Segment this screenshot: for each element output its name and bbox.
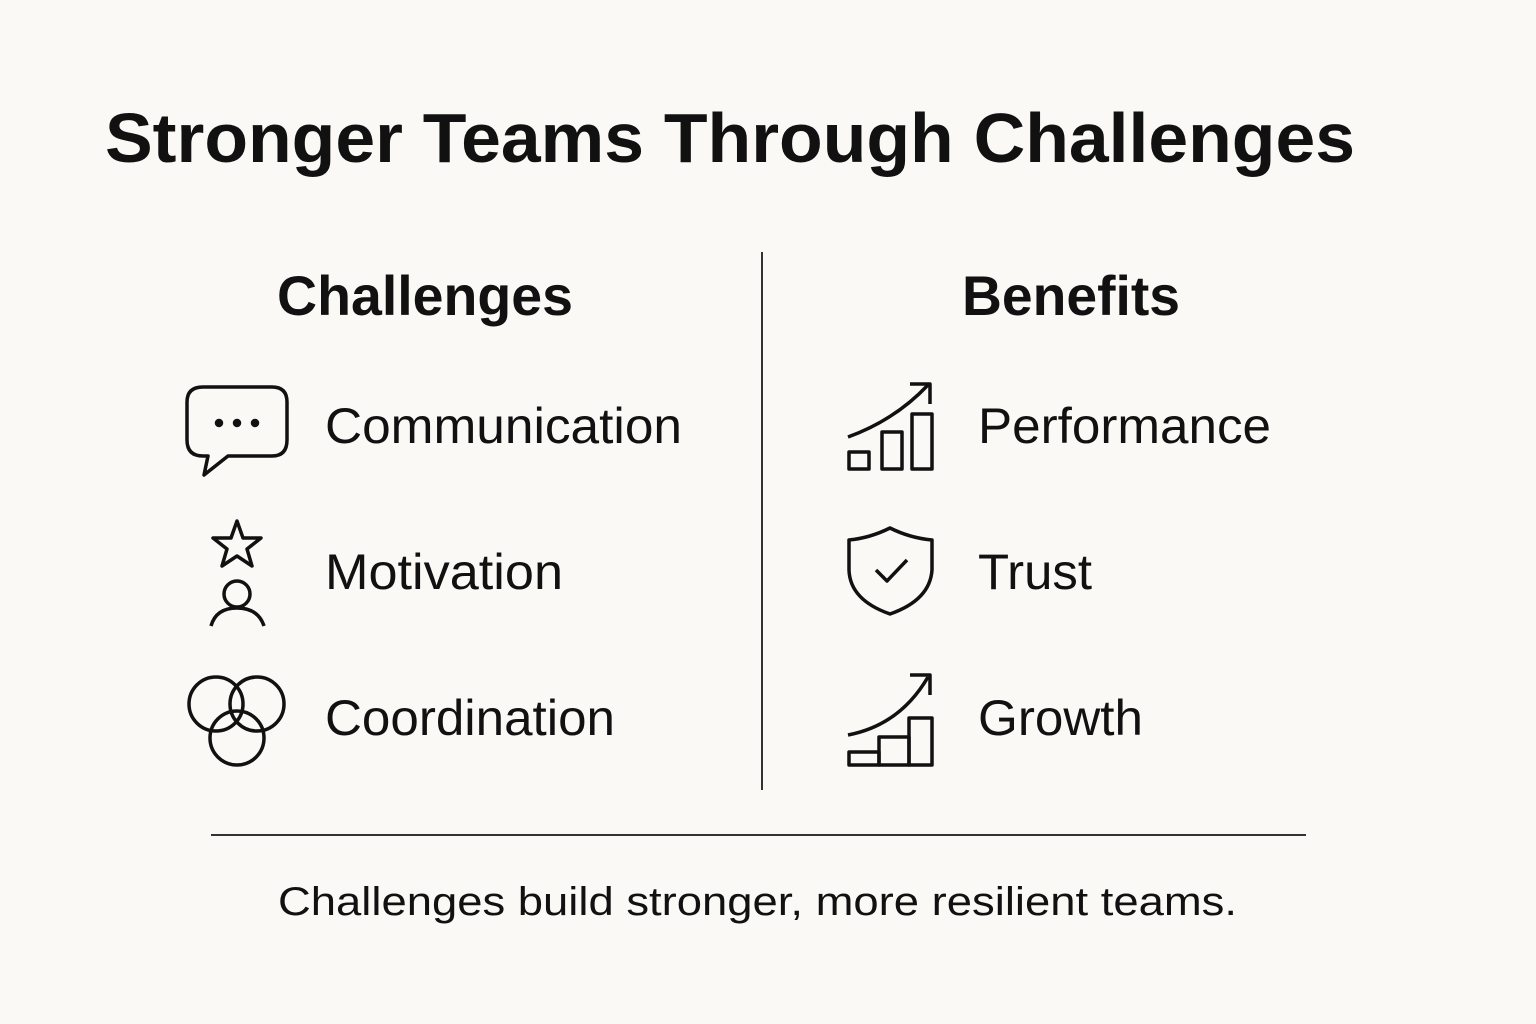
icon: growth chart <box>848 675 932 765</box>
heading: challenges: Challenges <box>277 264 573 327</box>
title: Stronger Teams Through Challenges <box>105 99 1355 177</box>
label: growth: Growth <box>978 690 1143 746</box>
icon: star and person <box>211 521 264 626</box>
panel: challenges <box>187 387 682 765</box>
icon: shield <box>849 528 932 614</box>
icon: performance chart <box>848 384 932 469</box>
label: coordination: Coordination <box>325 690 615 746</box>
icon: venn circles <box>189 677 284 765</box>
label: communication: Communication <box>325 398 682 454</box>
footer text: Challenges build stronger, more resilient teams. <box>278 880 1237 924</box>
panel: benefits <box>848 384 1271 765</box>
label: motivation: Motivation <box>325 544 563 600</box>
label: trust: Trust <box>978 544 1092 600</box>
label: performance: Performance <box>978 398 1271 454</box>
heading: benefits: Benefits <box>962 264 1180 327</box>
icon: speech bubble <box>187 387 287 475</box>
